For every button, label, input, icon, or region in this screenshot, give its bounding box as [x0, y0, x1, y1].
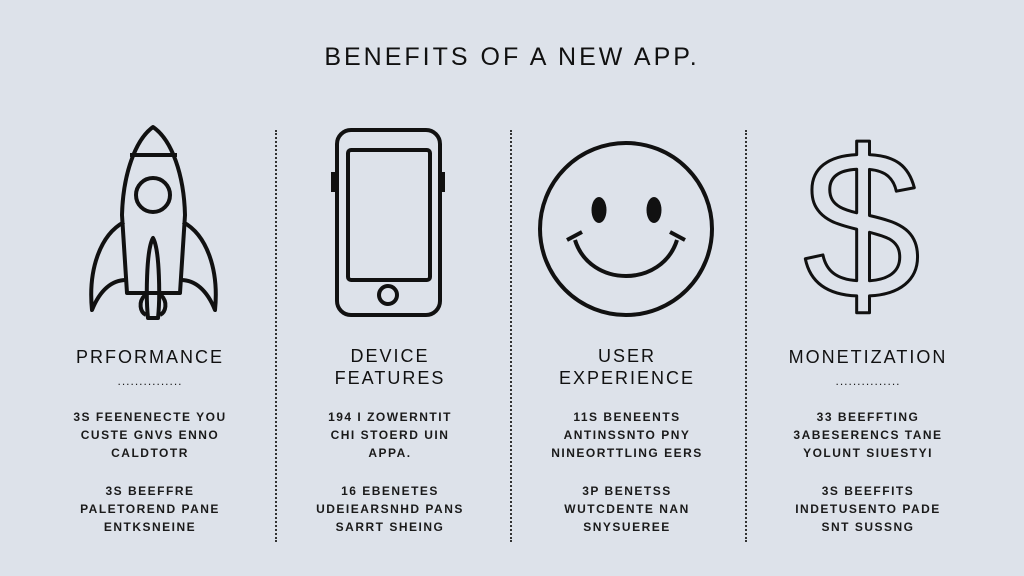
panel: performance: 3S FEENENECTE YOU — [73, 410, 227, 424]
panel: monetization: 3S BEEFFITS — [822, 484, 914, 498]
panel: performance: CALDTOTR — [111, 446, 189, 460]
panel: user experience: NINEORTTLING EERS — [551, 446, 703, 460]
panel: device features: UDEIEARSNHD PANS — [316, 502, 464, 516]
panel: monetization: ............... — [835, 374, 900, 388]
panel: device features: 194 I ZOWERNTIT — [328, 410, 452, 424]
panel: user experience: WUTCDENTE NAN — [564, 502, 690, 516]
panel: monetization — [789, 347, 947, 534]
icon: smiley — [540, 143, 712, 315]
panel: device features: CHI STOERD UIN — [331, 428, 449, 442]
panel: device features: FEATURES — [335, 368, 445, 388]
panel: performance: PRFORMANCE — [76, 347, 224, 367]
panel: device features: SARRT SHEING — [336, 520, 444, 534]
panel: user experience: 3P BENETSS — [582, 484, 672, 498]
panel: user experience: 11S BENEENTS — [573, 410, 681, 424]
panel: monetization: 33 BEEFFTING — [817, 410, 919, 424]
panel: user experience: EXPERIENCE — [559, 368, 695, 388]
panel: user experience: SNYSUEREE — [583, 520, 671, 534]
panel: performance: ENTKSNEINE — [104, 520, 196, 534]
panel: monetization: 3ABESERENCS TANE — [793, 428, 943, 442]
panel: monetization: SNT SUSSNG — [821, 520, 914, 534]
panel: device features — [316, 346, 464, 534]
title: BENEFITS OF A NEW APP. — [324, 43, 700, 71]
panel: device features: APPA. — [368, 446, 412, 460]
panel: performance: 3S BEEFFRE — [105, 484, 194, 498]
panel: user experience: USER — [598, 346, 656, 366]
icon: phone — [333, 130, 443, 315]
panel: monetization: INDETUSENTO PADE — [795, 502, 941, 516]
panel: monetization: YOLUNT SIUESTYI — [803, 446, 933, 460]
panel: user experience: ANTINSSNTO PNY — [564, 428, 690, 442]
icon: rocket — [91, 127, 216, 318]
panel: performance: PALETOREND PANE — [80, 502, 220, 516]
panel: performance: ............... — [117, 374, 182, 388]
panel: device features: 16 EBENETES — [341, 484, 439, 498]
panel: monetization: MONETIZATION — [789, 347, 947, 367]
panel: performance: CUSTE GNVS ENNO — [81, 428, 219, 442]
panel: performance — [73, 347, 227, 534]
icon: dollar: $ — [803, 106, 921, 343]
panel: user experience — [551, 346, 703, 534]
panel: device features: DEVICE — [350, 346, 430, 366]
